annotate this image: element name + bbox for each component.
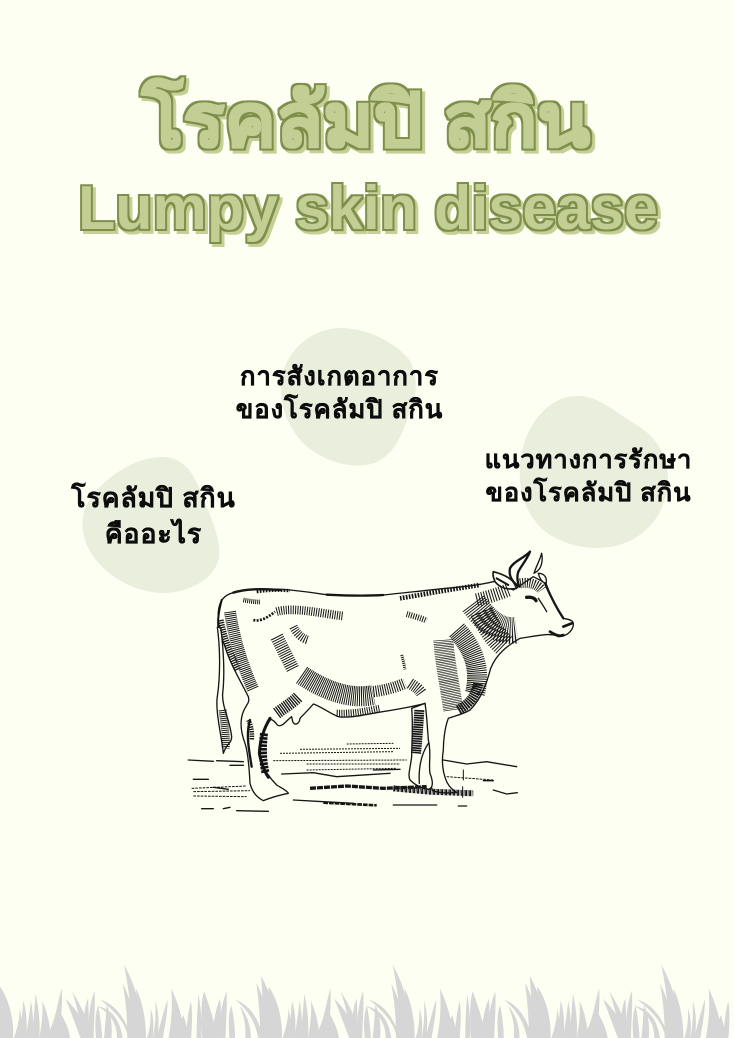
text: treatment: แนวทางการรักษา	[485, 446, 692, 474]
text: treatment: ของโรคลัมปิ สกิน	[486, 479, 691, 507]
text: symptoms: ของโรคลัมปิ สกิน	[236, 396, 443, 424]
ground lines	[188, 743, 517, 811]
body outline	[218, 577, 573, 801]
text: treatment	[485, 446, 692, 507]
text: what is lumpy skin: คืออะไร	[105, 519, 202, 549]
text: what is lumpy skin: โรคลัมปิ สกิน	[71, 483, 236, 513]
text: what is lumpy skin	[70, 482, 236, 549]
text: symptoms: การสังเกตอาการ	[240, 363, 439, 391]
title: English heading: Lumpy skin disease	[78, 174, 658, 243]
far legs	[409, 703, 432, 789]
text: symptoms	[236, 363, 443, 424]
shading hatch	[221, 585, 517, 773]
title: Thai heading: โรคลัมปิ สกิน	[141, 77, 590, 162]
tail	[217, 627, 232, 753]
head and horns	[493, 552, 572, 636]
